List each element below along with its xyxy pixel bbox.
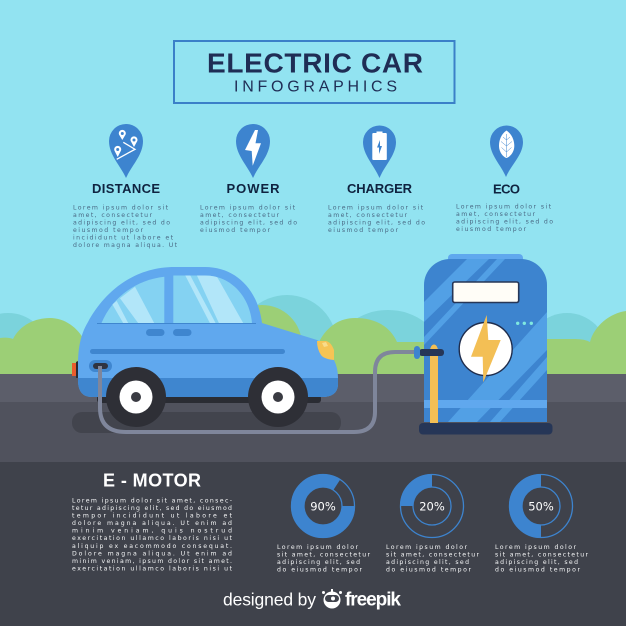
text: charger: adipiscing elit, sed do (328, 220, 425, 226)
text: eco: eiusmod tempor (456, 226, 526, 233)
caption: 50%: Lorem ipsum dolor (495, 544, 576, 551)
donut chart: 20% (400, 474, 464, 538)
donut chart: 90% (291, 474, 355, 538)
text: e-motor: Lorem ipsum dolor sit amet, consec- (72, 498, 232, 504)
icon: freepik mascot (322, 589, 342, 608)
head light (317, 341, 334, 360)
text: distance: Lorem ipsum dolor sit (73, 204, 169, 212)
heading: power: POWER (226, 181, 280, 196)
text: power: Lorem ipsum dolor sit (200, 204, 296, 212)
screen (453, 282, 519, 302)
car (72, 267, 338, 427)
column: distance (73, 124, 178, 249)
text: e-motor: exercitation ullamco laboris nisi ut (72, 535, 233, 542)
background hills (0, 295, 626, 395)
icon: charger pin (363, 126, 396, 178)
base (419, 423, 552, 434)
caption: 90%: Lorem ipsum dolor (277, 544, 358, 551)
heading: e-motor: E - MOTOR (103, 470, 201, 490)
door handles (146, 329, 164, 336)
text: eco (456, 204, 553, 233)
text: charger: amet, consectetur (328, 212, 407, 219)
caption: 90%: adipiscing elit, sed (277, 559, 360, 566)
text: power (200, 204, 297, 234)
caption: 50%: do eiusmod tempor (495, 566, 580, 574)
text: power: adipiscing elit, sed do (200, 220, 297, 226)
car windows (97, 275, 256, 324)
icon: power pin (236, 124, 270, 178)
text: distance: eiusmod tempor (73, 227, 143, 234)
text: e-motor: tetur adipiscing elit, sed do eiusmod (72, 505, 232, 512)
donut chart: 50%: 50% (528, 499, 554, 513)
icon: distance pin (109, 124, 143, 178)
title box: ELECTRIC CAR (207, 47, 423, 78)
caption: 50%: adipiscing elit, sed (495, 559, 578, 566)
text: e-motor: tempor incididunt ut labore et (72, 513, 233, 520)
text: e-motor: aliquip ex eacommodo consequat. (72, 543, 232, 550)
column: charger (328, 126, 425, 234)
text: charger (328, 204, 425, 234)
text: e-motor: exercitation ullamco laboris nisi ut (72, 566, 233, 572)
plug (419, 349, 444, 356)
text: eco: amet, consectetur (456, 211, 535, 218)
footer: designed by freepik: freepik (345, 590, 401, 611)
bottom dark panel (0, 462, 626, 626)
text: e-motor: minim veniam, ipsum dolor sit amet. (72, 558, 232, 565)
footer: designed by freepik (223, 589, 401, 611)
text: distance: incididunt ut labore et (73, 234, 174, 242)
text: distance: adipiscing elit, sed do (73, 220, 170, 226)
caption: 90%: do eiusmod tempor (277, 566, 362, 574)
caption: 20%: Lorem ipsum dolor (386, 544, 467, 551)
charging station (414, 254, 552, 434)
column: eco (456, 126, 553, 233)
icon: eco pin (490, 126, 523, 177)
motor section (72, 470, 233, 572)
caption: 20% (386, 544, 479, 574)
text: distance: amet, consectetur (73, 212, 152, 219)
text: eco: Lorem ipsum dolor sit (456, 204, 552, 210)
caption: 20%: adipiscing elit, sed (386, 559, 469, 566)
text: power: amet, consectetur (200, 212, 279, 219)
caption: 50%: sit amet, consectetur (495, 552, 588, 558)
footer: designed by freepik: designed by (223, 590, 316, 610)
text: distance: dolore magna aliqua. Ut (73, 242, 178, 249)
column: power (200, 124, 297, 234)
tail light (72, 363, 78, 376)
bolt emblem (459, 315, 512, 382)
title box: INFOGRAPHICS (234, 78, 397, 96)
text: e-motor (72, 498, 233, 572)
indicator dots (516, 322, 533, 325)
caption: 50% (495, 544, 588, 574)
donut chart: 50% (509, 474, 572, 538)
text: charger: eiusmod tempor (328, 227, 398, 234)
donut chart: 20%: 20% (419, 499, 445, 513)
yellow pole (430, 344, 438, 423)
text: e-motor: Dolore magna aliqua. Ut enim ad (72, 550, 232, 557)
side stripe (90, 349, 285, 354)
text: eco: adipiscing elit, sed do (456, 218, 553, 226)
charging cable (100, 352, 416, 432)
text: power: eiusmod tempor (200, 227, 270, 234)
donut chart: 90%: 90% (310, 499, 336, 513)
caption: 20%: sit amet, consectetur (386, 552, 479, 558)
road (0, 374, 626, 462)
charging port (89, 360, 112, 372)
heading: distance: DISTANCE (92, 181, 160, 196)
text: distance (73, 204, 178, 249)
heading: eco: ECO (493, 182, 520, 196)
caption: 20%: do eiusmod tempor (386, 566, 471, 574)
wheels (106, 367, 308, 427)
text: charger: Lorem ipsum dolor sit (328, 204, 424, 212)
title box (174, 41, 454, 103)
caption: 90% (277, 544, 370, 574)
caption: 90%: sit amet, consectetur (277, 552, 370, 558)
text: e-motor: minim veniam, quis nostrud (72, 528, 232, 535)
ground shadow (72, 412, 341, 433)
text: e-motor: dolore magna aliqua. Ut enim ad (72, 520, 232, 527)
heading: charger: CHARGER (347, 181, 413, 196)
